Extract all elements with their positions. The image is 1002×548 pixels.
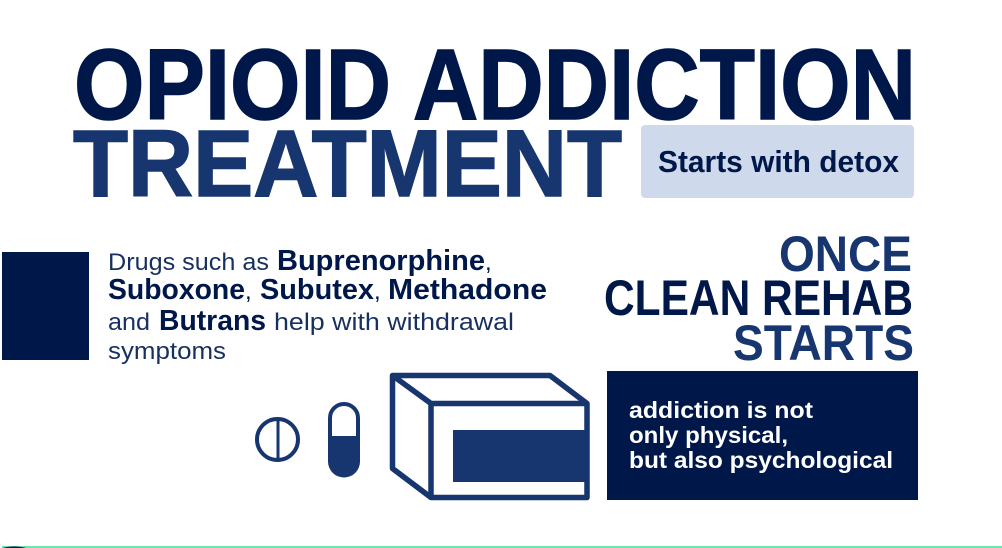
drugs text block: and bbox=[108, 309, 150, 336]
drugs text block: Methadone bbox=[388, 274, 547, 306]
heading: once clean rehab starts: STARTS bbox=[733, 315, 914, 371]
panel: psychological note bbox=[607, 371, 918, 500]
heading: once clean rehab starts: ONCE bbox=[779, 226, 912, 282]
drugs text block: Drugs such as bbox=[108, 249, 269, 276]
panel: psychological note: only physical, bbox=[629, 422, 788, 448]
drugs text block: Butrans bbox=[159, 305, 266, 337]
icon: medicine box bbox=[392, 376, 587, 498]
icon: capsule bbox=[328, 404, 360, 478]
drugs text block: , bbox=[485, 249, 492, 276]
panel: psychological note: but also psychological bbox=[629, 447, 893, 473]
drugs text block: , bbox=[245, 278, 252, 305]
drugs text block: , bbox=[374, 278, 381, 305]
title line 2: TREATMENT bbox=[73, 111, 622, 217]
drugs text block: Buprenorphine bbox=[277, 245, 485, 277]
drugs text block: Suboxone bbox=[108, 274, 245, 306]
callout: starts with detox bbox=[641, 125, 914, 198]
drugs text block: Subutex bbox=[260, 274, 374, 306]
icon: round tablet bbox=[257, 419, 298, 460]
drugs text block: help with withdrawal bbox=[274, 309, 514, 336]
drugs text block bbox=[108, 245, 547, 365]
callout: starts with detox: Starts with detox bbox=[658, 144, 900, 179]
bottom green rule bbox=[2, 546, 1002, 548]
panel: psychological note: addiction is not bbox=[629, 397, 813, 423]
drug panel block bbox=[2, 252, 89, 360]
title line 1: OPIOID ADDICTION bbox=[74, 29, 916, 141]
heading: once clean rehab starts bbox=[604, 226, 914, 371]
heading: once clean rehab starts: CLEAN REHAB bbox=[604, 270, 913, 326]
drugs text block: symptoms bbox=[108, 338, 226, 365]
